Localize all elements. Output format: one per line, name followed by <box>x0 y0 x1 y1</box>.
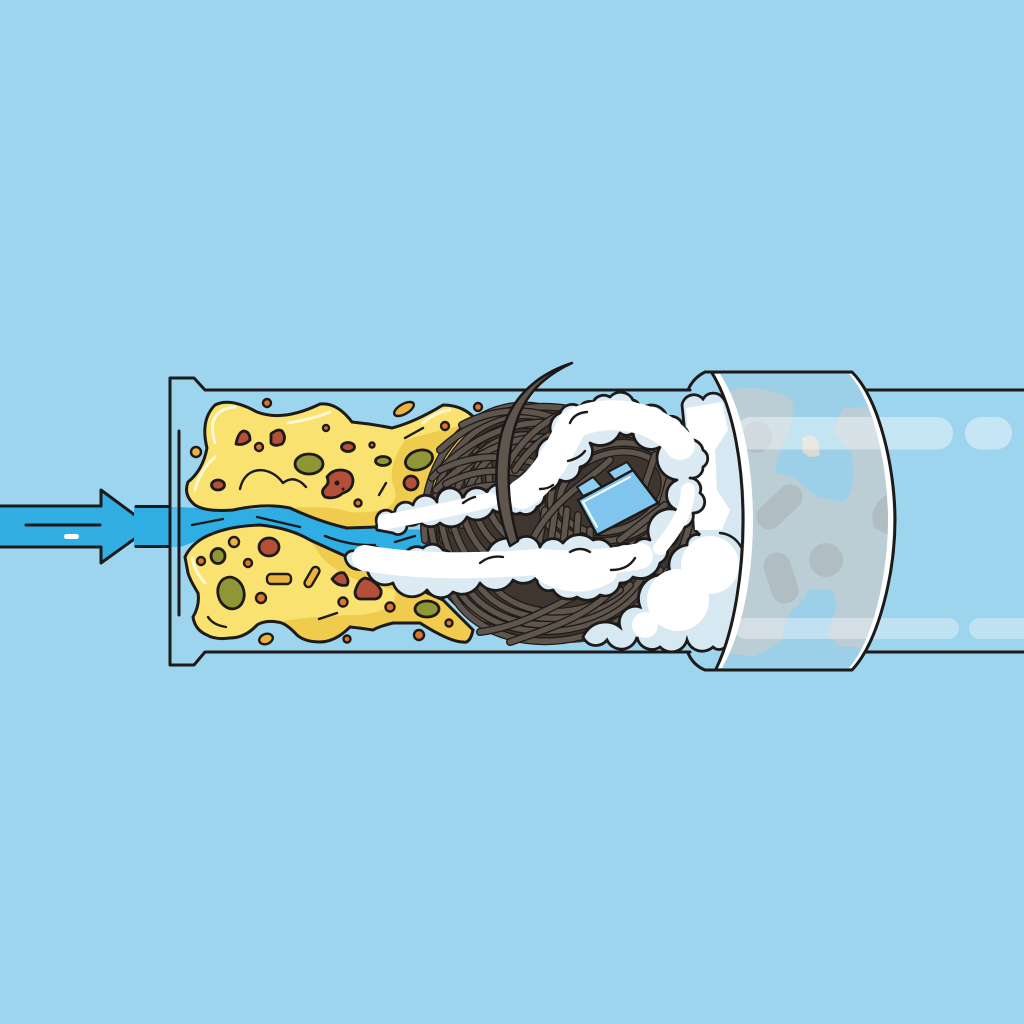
toy brick stuck in hair <box>577 462 658 535</box>
transparent pipe coupling <box>688 372 1024 670</box>
tangled hair ball <box>424 405 704 643</box>
loose hair strand <box>496 363 572 546</box>
loose debris particles <box>191 399 482 646</box>
water stream through the pipe <box>134 506 440 572</box>
foam ring and tails <box>345 392 708 600</box>
scene: clogged pipe <box>0 362 1024 672</box>
back cloud of foam <box>583 393 752 652</box>
upper grease deposit <box>187 402 478 545</box>
pipe body outline <box>170 378 1024 665</box>
inflow arrow <box>0 490 151 563</box>
lower grease deposit <box>185 525 473 642</box>
